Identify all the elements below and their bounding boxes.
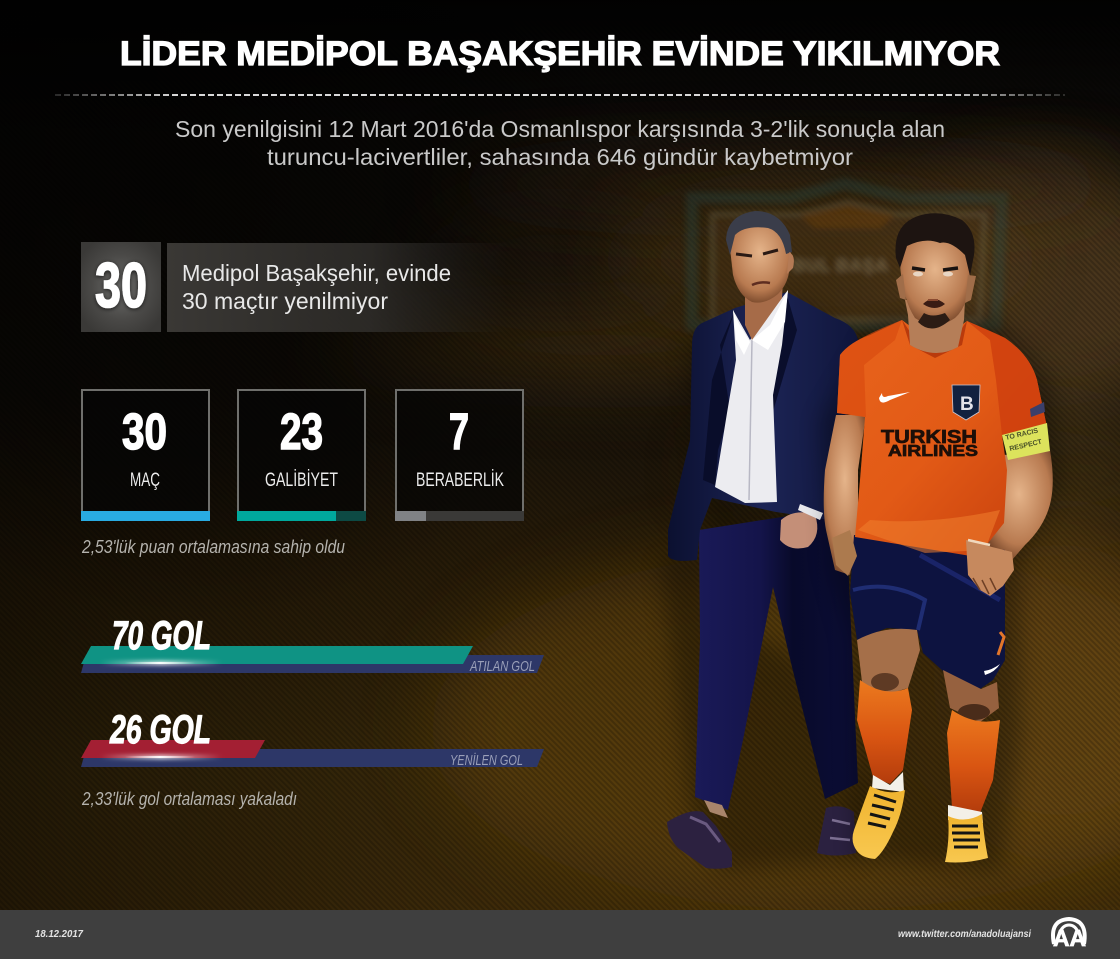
club crest: B [960,394,974,415]
title divider [55,94,1065,96]
shorts [850,535,1005,689]
faded club badge [692,184,1002,325]
stat card: matches [81,390,210,521]
right knee [943,670,999,722]
stat card: matches: MAÇ [130,470,160,491]
socks [857,680,912,784]
chart: goals scored: ATILAN GOL [469,658,535,675]
stat card: draws: 7 [449,403,469,460]
logo: Anadolu Agency: AA [1053,925,1086,951]
title: LİDER MEDİPOL BAŞAKŞEHİR EVİNDE YIKILMIYOR [120,35,1000,73]
left arm [824,415,866,575]
club crest [952,385,980,420]
trousers [695,510,858,810]
left thigh and knee [857,629,920,695]
date: 18.12.2017 [35,929,83,940]
points note: 2,53'lük puan ortalamasına sahip oldu [81,537,345,557]
white sock tops [872,772,904,792]
player neck and head [895,213,976,353]
goal average note: 2,33'lük gol ortalaması yakaladı [81,789,297,809]
badge: 30 [81,242,161,332]
right arm [985,450,1053,560]
subtitle: Son yenilgisini 12 Mart 2016'da Osmanlıspor karşısında 3-2'lik sonuçla alan [175,116,945,142]
stat card: wins [237,390,366,521]
nike logo [879,392,910,403]
chart: goals scored [81,614,544,675]
chart: goals conceded: 26 GOL [109,708,211,752]
figure: coach [660,211,870,870]
captain armband: RESPECT [1009,439,1043,453]
stat card: draws [395,390,524,521]
boots [853,786,905,859]
coach shoes [667,811,732,869]
jacket lapels [770,292,797,490]
subtitle [175,116,945,170]
stat card: wins: GALİBİYET [265,470,338,491]
player hand [966,540,1014,596]
coach hand [780,512,817,548]
streak text: 30 maçtır yenilmiyor [182,288,388,314]
streak text: Medipol Başakşehir, evinde [182,260,451,286]
chart: goals conceded [81,708,544,769]
shirt [715,290,788,503]
sponsor text [881,427,978,460]
panel: match stats [81,390,524,521]
captain armband [1002,423,1050,460]
subtitle: turuncu-lacivertliler, sahasında 646 gündür kaybetmiyor [267,144,853,170]
stat card: draws: BERABERLİK [416,470,504,491]
stat card: matches: 30 [122,403,167,460]
badge lettering: BUL BAŞA [793,256,889,275]
streak text [167,243,507,332]
chart: goals conceded: YENİLEN GOL [450,752,523,769]
stat card: wins: 23 [280,403,323,460]
sponsor text: AIRLINES [888,443,978,460]
badge: 30: 30 [95,251,147,321]
sponsor text: TURKISH [881,427,977,447]
social link: www.twitter.com/anadoluajansi [898,929,1031,940]
captain armband: TO RACIS [1005,428,1039,442]
coach neck and head [726,211,794,340]
chart: goals scored: 70 GOL [112,614,211,658]
jersey [837,320,1047,557]
footer bar [0,910,1120,959]
figure: player [820,213,1060,870]
panel: 30 match streak [81,242,507,332]
jacket [668,292,858,561]
